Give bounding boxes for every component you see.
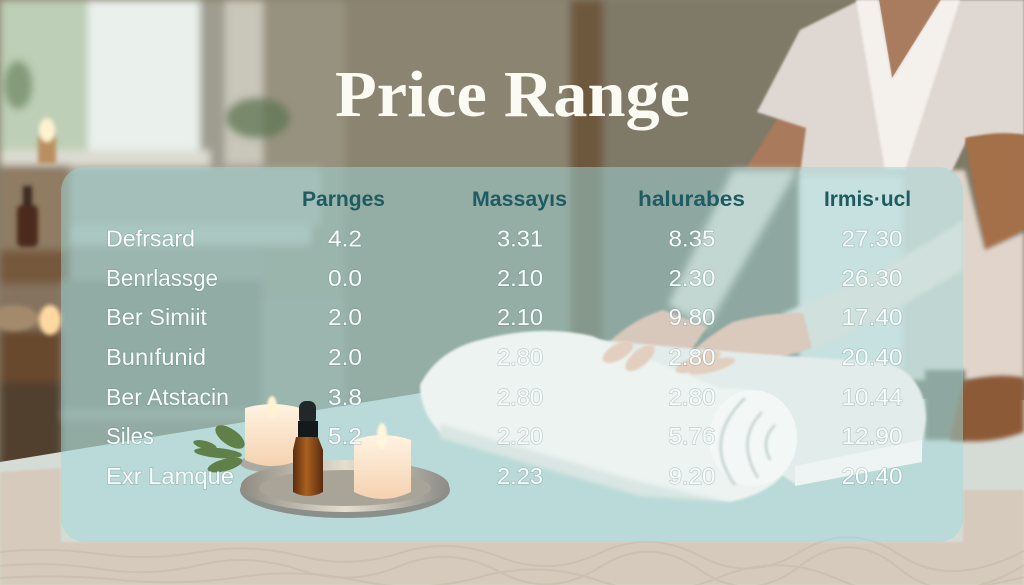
- bed and blanket: [0, 392, 1024, 585]
- table header row: halurabes: [638, 188, 745, 211]
- row: Ber Atstacin: Ber Atstacin: [106, 384, 229, 410]
- row: Defrsard: 27.30: [842, 226, 902, 252]
- row: Bunifunid: Bunıfunid: [106, 344, 206, 370]
- row: Bunifunid: 2.80: [497, 344, 543, 370]
- table header row: Massayıs: [472, 188, 567, 211]
- row: Exr Lamque: [106, 463, 902, 489]
- row: Exr Lamque: 20.40: [842, 463, 902, 489]
- leaves: [192, 421, 249, 475]
- row: Ber Atstacin: 3.8: [328, 384, 362, 410]
- row: Siles: 5.76: [668, 423, 716, 449]
- row: Siles: [106, 423, 902, 449]
- row: Ber Simiit: 2.10: [497, 304, 543, 330]
- tray: [240, 460, 450, 518]
- candle and bottle on left shelf: [0, 118, 61, 335]
- row: Exr Lamque: 2.23: [497, 463, 543, 489]
- table header row: Irmis·ucl: [824, 188, 911, 211]
- row: Defrsard: 4.2: [328, 226, 362, 252]
- row: Bunifunid: 20.40: [842, 344, 902, 370]
- translucent table panel: [61, 167, 963, 542]
- row: Siles: 12.90: [842, 423, 902, 449]
- row: Ber Atstacin: 10.44: [842, 384, 902, 410]
- row: Ber Atstacin: 2.80: [497, 384, 543, 410]
- row: Defrsard: 8.35: [668, 226, 716, 252]
- row: Ber Simiit: 2.0: [328, 304, 362, 330]
- row: Ber Atstacin: 2.80: [668, 384, 716, 410]
- row: Defrsard: [106, 226, 902, 252]
- row: Bunifunid: 2.80: [668, 344, 716, 370]
- small tray with candle and leaves: [192, 396, 300, 475]
- row: Exr Lamque: 9.20: [668, 463, 716, 489]
- row: Defrsard: 3.31: [497, 226, 543, 252]
- row: Ber Simiit: 9.80: [668, 304, 716, 330]
- row: Siles: 5.2: [328, 423, 362, 449]
- row: Bunifunid: 2.0: [328, 344, 362, 370]
- row: Exr Lamque: Exr Lamque: [106, 463, 234, 489]
- row: Siles: Siles: [106, 423, 154, 449]
- hands resting on towel fingers: [599, 337, 737, 378]
- row: Benrlassge: 0.0: [328, 265, 362, 291]
- table header row: [302, 188, 911, 211]
- large candle: [354, 423, 411, 499]
- arms and hands: [603, 170, 963, 373]
- row: Defrsard: Defrsard: [106, 226, 195, 252]
- row: Ber Simiit: 17.40: [842, 304, 902, 330]
- row: Benrlassge: 2.30: [668, 265, 716, 291]
- row: Benrlassge: 2.10: [497, 265, 543, 291]
- row: Benrlassge: 26.30: [842, 265, 902, 291]
- row: Siles: 2.20: [497, 423, 543, 449]
- title: Price Range: [335, 58, 690, 131]
- row: Ber Atstacin: [106, 384, 902, 410]
- table: [106, 188, 911, 489]
- therapist: [745, 0, 1024, 441]
- row: Ber Simiit: Ber Simiit: [106, 304, 207, 330]
- row: Bunifunid: [106, 344, 902, 370]
- row: Benrlassge: Benrlassge: [106, 265, 218, 291]
- essential oil bottle: [293, 401, 323, 496]
- rolled towel: [420, 331, 926, 502]
- row: Ber Simiit: [106, 304, 902, 330]
- row: Benrlassge: [106, 265, 902, 291]
- table header row: Parnges: [302, 188, 385, 211]
